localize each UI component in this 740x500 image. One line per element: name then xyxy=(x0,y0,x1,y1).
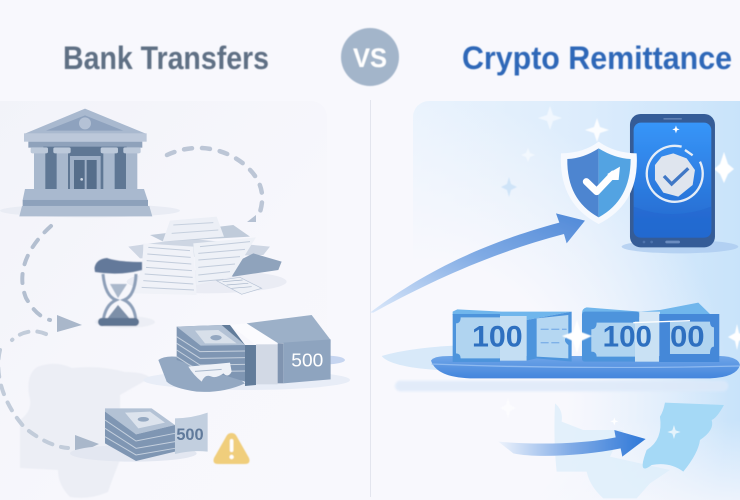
dashed route: bank to papers xyxy=(167,148,262,212)
smartphone xyxy=(622,114,738,253)
arrowhead to small stack xyxy=(75,435,99,455)
stack of papers xyxy=(127,217,287,295)
route arrowhead small xyxy=(247,215,256,222)
panel: bank transfers background xyxy=(0,101,327,500)
VS badge xyxy=(341,28,399,86)
small banknote stack 500 xyxy=(70,408,208,462)
sparkles right top xyxy=(501,106,734,197)
banknote 100 left: 100 xyxy=(472,320,523,353)
arrow: to destination xyxy=(498,430,646,457)
VS badge: VS xyxy=(353,43,387,73)
small banknote stack 500: 500 xyxy=(176,426,204,444)
dashed route: lower left xyxy=(0,331,68,448)
left map silhouette xyxy=(20,364,150,498)
central divider xyxy=(370,100,372,497)
dashed route: bank to hourglass xyxy=(22,226,51,320)
title: Bank Transfers: Bank Transfers xyxy=(63,40,269,76)
warning triangle icon xyxy=(214,433,250,464)
destination map xyxy=(554,403,724,498)
title: Crypto Remittance: Crypto Remittance xyxy=(462,40,732,76)
banknote 100 right: 00 xyxy=(670,320,705,353)
large banknote stack 500: 500 xyxy=(291,350,323,371)
bank building xyxy=(0,109,180,217)
arrow: rising to shield xyxy=(370,213,585,313)
shield icon xyxy=(561,142,637,224)
sparkles on banknotes xyxy=(500,320,740,418)
banknote 100 right: 100 xyxy=(603,320,652,353)
panel: crypto remittance background xyxy=(413,101,740,500)
arrowhead to hourglass xyxy=(57,315,82,332)
banknote 100 right xyxy=(582,303,719,362)
large banknote stack 500 xyxy=(143,315,350,392)
banknote 100 left xyxy=(453,309,572,362)
banknote platform with glow xyxy=(382,345,740,391)
hourglass xyxy=(94,258,155,328)
